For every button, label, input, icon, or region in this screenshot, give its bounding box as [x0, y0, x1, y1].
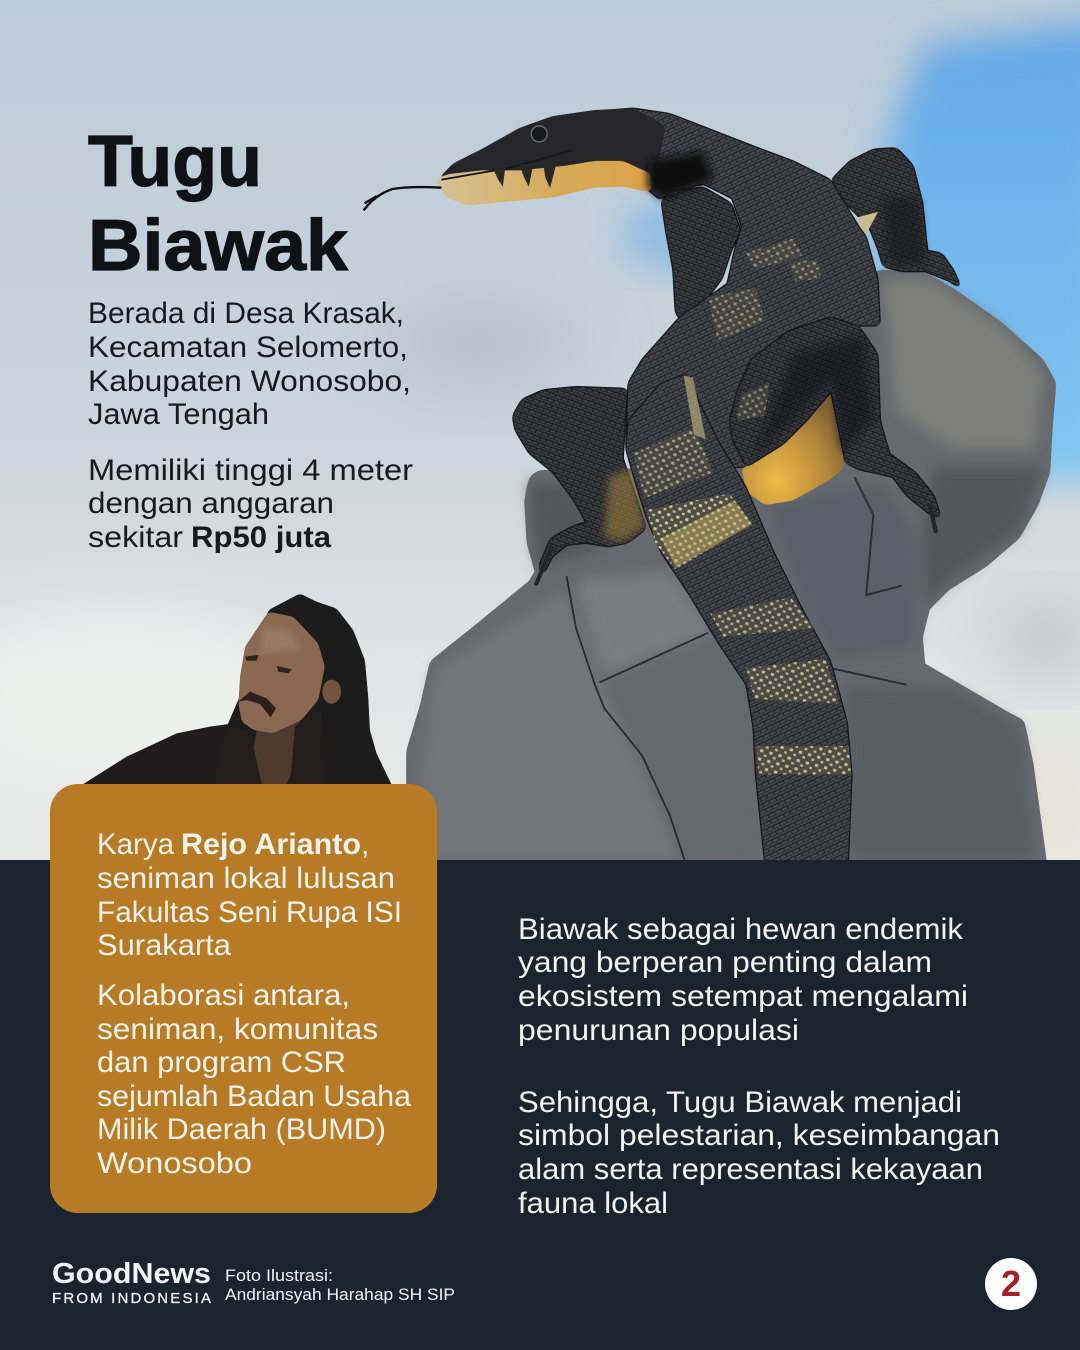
sky background	[0, 0, 1080, 870]
text: collaboration: dan program CSR	[97, 1046, 346, 1079]
photo credit: Andriansyah Harahap SH SIP	[225, 1286, 455, 1304]
lower jaw	[434, 161, 652, 206]
mouth line	[441, 150, 571, 180]
hind leg shading	[755, 335, 873, 453]
photo credit: Foto Ilustrasi:	[225, 1267, 333, 1285]
biawak statue	[364, 108, 963, 888]
text: symbol of conservation	[518, 1086, 1000, 1220]
text: endemic population: yang berperan penting dalam	[518, 946, 932, 979]
rock crack	[567, 477, 906, 860]
text: artist credit: Surakarta	[97, 929, 231, 962]
page number: 2	[1001, 1263, 1021, 1304]
text: location	[88, 297, 411, 431]
text: artist credit: ,	[361, 828, 369, 861]
text: endemic population	[518, 913, 968, 1047]
text: height and budget: dengan anggaran	[88, 487, 334, 520]
moustache	[238, 692, 276, 717]
text: collaboration: seniman, komunitas	[97, 1013, 378, 1046]
eyes	[245, 655, 292, 673]
text: artist credit: Fakultas Seni Rupa ISI	[97, 896, 402, 929]
left front leg	[512, 386, 647, 576]
far hind leg	[831, 148, 963, 291]
text: artist credit: seniman lokal lulusan	[97, 862, 395, 895]
photo: Rejo Arianto	[83, 593, 394, 790]
head	[434, 108, 666, 182]
text: endemic population: Biawak sebagai hewan endemik	[518, 913, 964, 946]
right hind leg	[729, 317, 942, 520]
text: height and budget: Memiliki tinggi 4 meter	[88, 454, 413, 487]
shirt	[83, 723, 247, 784]
text: location: Jawa Tengah	[88, 398, 269, 431]
neck dark patch	[647, 151, 713, 199]
text: artist credit: Rejo Arianto	[181, 828, 361, 861]
far leg yellow patch	[857, 212, 878, 236]
dark bottom panel	[0, 860, 1080, 1350]
left claw	[536, 548, 551, 584]
left leg yellow underside	[604, 468, 644, 541]
logo: GoodNews from Indonesia: FROM INDONESIA	[52, 1290, 211, 1307]
text: symbol of conservation: alam serta representasi kekayaan	[518, 1153, 983, 1186]
right claw	[930, 505, 936, 531]
far leg shading	[883, 199, 925, 265]
ear	[322, 680, 341, 704]
body and neck	[600, 108, 880, 468]
page number	[985, 1258, 1037, 1310]
logo: GoodNews from Indonesia	[52, 1258, 211, 1307]
text: height and budget	[88, 454, 413, 554]
neck	[252, 720, 300, 784]
text: collaboration: Kolaborasi antara,	[97, 979, 350, 1012]
text: location: Berada di Desa Krasak,	[88, 297, 404, 330]
boulder tones	[883, 279, 1043, 449]
long hair	[203, 593, 394, 790]
text: artist credit: Karya	[97, 828, 174, 861]
text: location: Kecamatan Selomerto,	[88, 331, 408, 364]
text: endemic population: ekosistem setempat mengalami	[518, 980, 968, 1013]
text: symbol of conservation: simbol pelestarian, keseimbangan	[518, 1119, 1000, 1152]
text: height and budget: sekitar	[88, 521, 183, 554]
text: artist credit	[97, 828, 402, 962]
tail bands	[634, 376, 851, 774]
near front leg behind neck	[661, 187, 741, 321]
title: Tugu	[88, 122, 262, 202]
underbelly glow	[741, 383, 845, 505]
text: height and budget: Rp50 juta	[191, 521, 331, 554]
logo: GoodNews from Indonesia: GoodNews	[52, 1258, 211, 1290]
text: location: Kabupaten Wonosobo,	[88, 365, 411, 398]
title	[88, 122, 349, 286]
forehead highlight	[260, 627, 300, 653]
body speckles	[708, 239, 821, 420]
tail	[626, 373, 852, 888]
text: collaboration: Wonosobo	[97, 1147, 252, 1180]
face	[238, 612, 325, 733]
text: collaboration: sejumlah Badan Usaha	[97, 1080, 411, 1113]
title: Biawak	[88, 206, 349, 286]
text: symbol of conservation: fauna lokal	[518, 1187, 668, 1220]
text: collaboration: Milik Daerah (BUMD)	[97, 1113, 386, 1146]
text: endemic population: penurunan populasi	[518, 1014, 799, 1047]
eye	[531, 126, 547, 142]
text: collaboration	[97, 979, 411, 1180]
panel: artist	[50, 784, 437, 1213]
text: symbol of conservation: Sehingga, Tugu Biawak menjadi	[518, 1086, 962, 1119]
rock monument	[406, 269, 1056, 888]
photo credit	[225, 1267, 455, 1304]
jaw stripes	[493, 161, 557, 188]
tongue	[364, 187, 441, 210]
hair strands over neck	[213, 707, 327, 784]
